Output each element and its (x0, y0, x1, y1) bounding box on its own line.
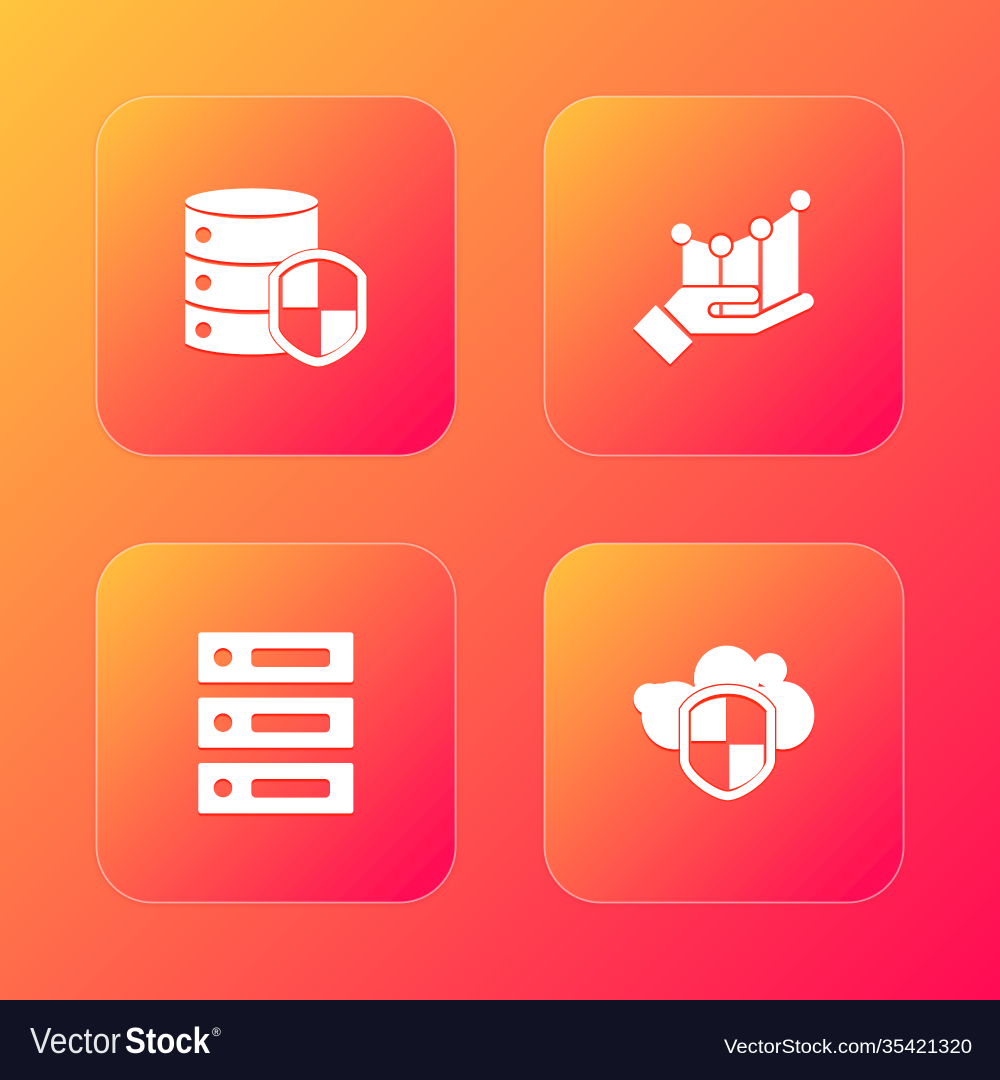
hand (633, 287, 814, 364)
shield (274, 254, 362, 362)
logo: VectorStock: Stock (125, 1020, 211, 1061)
finger fill (711, 302, 759, 315)
logo: VectorStock (30, 1020, 221, 1061)
logo: VectorStock: Vector (30, 1020, 121, 1061)
image id text: VectorStock.com/35421320 (724, 1037, 972, 1058)
cloud (634, 646, 814, 749)
panel: server rack card (96, 544, 456, 902)
panel: cloud shield card (544, 544, 904, 902)
logo: VectorStock: ® (212, 1025, 221, 1039)
footer bar (0, 1000, 1000, 1080)
shield (684, 689, 771, 796)
panel: database shield card (96, 96, 456, 456)
thumb outline (709, 293, 802, 317)
chart bars (683, 209, 798, 309)
icon: server rack (198, 632, 353, 813)
chart points (671, 190, 810, 258)
icon: cloud with shield (634, 646, 814, 796)
icon: database with shield (185, 188, 362, 362)
panel: growth chart in hand card (544, 96, 904, 456)
icon: hand holding chart (633, 190, 814, 364)
chart stems (716, 303, 726, 316)
database cylinder (185, 188, 318, 354)
